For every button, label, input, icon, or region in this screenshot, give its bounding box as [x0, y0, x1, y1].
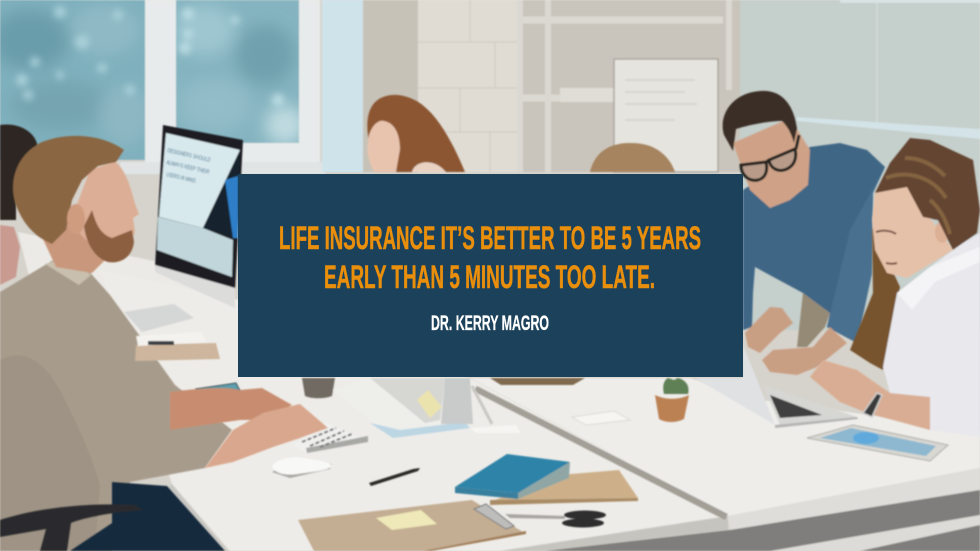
- paper on desk: [572, 411, 630, 425]
- clipboard with sticky note: [298, 500, 526, 551]
- second monitor base: [333, 378, 520, 438]
- tablet on right desk: [807, 425, 948, 461]
- window with trees, left: [0, 0, 150, 160]
- potted plant: [655, 378, 689, 422]
- quote panel: [238, 174, 743, 377]
- clip: [474, 504, 514, 529]
- glasses: [741, 135, 799, 180]
- quote author: DR. KERRY MAGRO: [431, 312, 549, 335]
- dark jeans: [70, 482, 225, 551]
- wire basket: [490, 378, 585, 385]
- quote text: [279, 220, 701, 295]
- tablet on desk: [196, 383, 240, 395]
- face and neck: [733, 118, 810, 208]
- woman in background: [367, 95, 465, 172]
- notebook: [455, 454, 570, 493]
- mug: [302, 378, 335, 398]
- hoodie: [883, 233, 980, 437]
- eye and lips: [876, 231, 897, 264]
- blue notebook on kraft folder: [455, 454, 638, 505]
- whiteboard: [614, 59, 718, 172]
- glass wall, right: [740, 0, 980, 330]
- trousers: [797, 293, 830, 347]
- wireless keyboard: [292, 423, 368, 453]
- window with trees, centre: [175, 0, 305, 145]
- monitor screen text: [166, 148, 211, 185]
- hair: [723, 91, 797, 151]
- desk items near monitor: [124, 304, 335, 398]
- beard: [84, 210, 134, 262]
- hands typing on keyboard: [170, 388, 368, 468]
- monitor screen text: DESIGNERS SHOULD: [167, 148, 211, 164]
- white desk, left: [100, 270, 728, 551]
- man in blue sweater: [723, 91, 885, 375]
- long hair: [850, 227, 900, 370]
- person behind panel, hair: [590, 143, 675, 172]
- hair: [13, 136, 124, 244]
- grey wall: [363, 0, 420, 172]
- monitor screen text: USERS IN MIND.: [166, 172, 197, 185]
- dreadlocks: [875, 138, 980, 250]
- pale blue wall strip: [322, 0, 363, 172]
- window frames: [145, 0, 320, 165]
- brick wall: [418, 0, 518, 172]
- hand and forearm: [810, 360, 930, 430]
- sweater: [743, 143, 885, 343]
- woman with dreadlocks in white hoodie: [810, 138, 980, 437]
- man with beard, foreground left: [0, 136, 232, 551]
- shelving: [518, 0, 740, 172]
- lower arm and hand: [205, 404, 328, 468]
- mouse: [272, 457, 332, 478]
- upper arm: [170, 388, 292, 430]
- notebook stack: [135, 343, 220, 361]
- woman at far left: [0, 125, 38, 285]
- pen: [369, 468, 420, 486]
- neck and face: [42, 210, 110, 273]
- monitor screen text: ALWAYS KEEP THEIR: [166, 160, 210, 176]
- laptop: [695, 345, 858, 428]
- sweater: [0, 256, 232, 551]
- hands: [745, 307, 793, 353]
- face: [872, 183, 953, 278]
- kraft folder: [490, 470, 638, 502]
- sticky note: [376, 510, 437, 530]
- smartwatch: [863, 393, 882, 417]
- office chair: [0, 504, 143, 551]
- quote text: EARLY THAN 5 MINUTES TOO LATE.: [324, 259, 655, 295]
- monitor, left: [155, 125, 243, 308]
- desks, far left: [18, 232, 248, 402]
- scissors: [505, 510, 606, 528]
- ear: [935, 221, 949, 243]
- keyboard, back: [124, 304, 194, 332]
- ear: [67, 204, 85, 234]
- white desk, right: [470, 378, 980, 551]
